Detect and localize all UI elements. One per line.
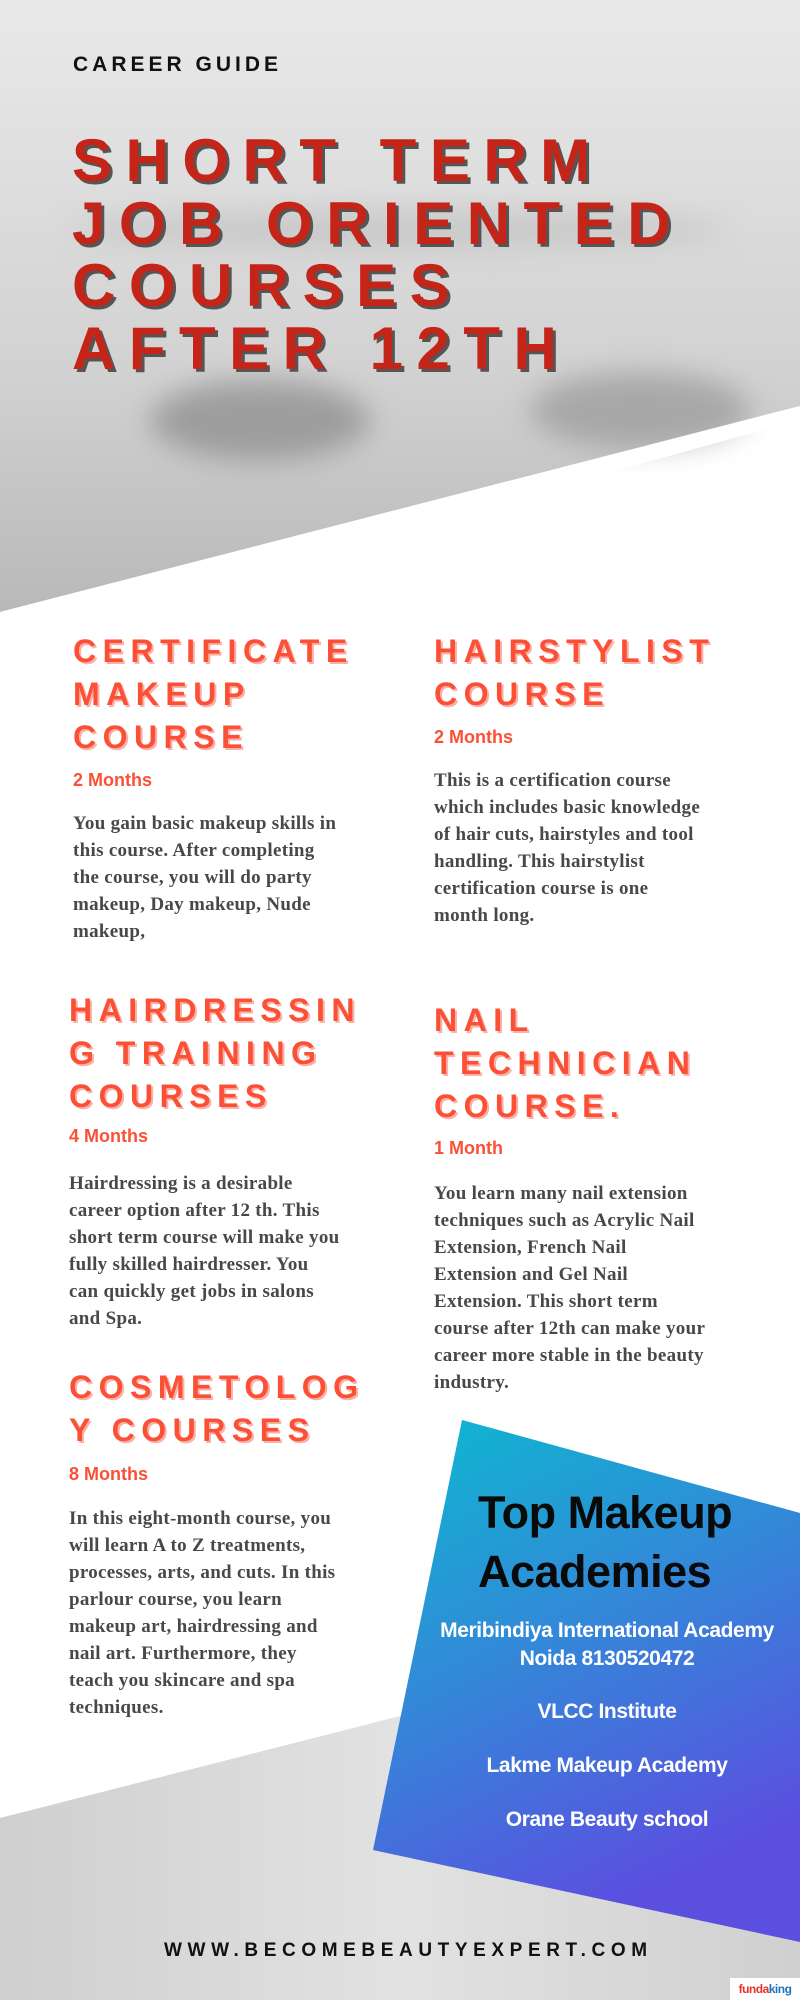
heading: TECHNICIAN bbox=[434, 1045, 696, 1081]
panel: hairdressing training courses bbox=[69, 992, 361, 1329]
academy list: Noida 8130520472 bbox=[520, 1647, 694, 1670]
title: JOB ORIENTED bbox=[72, 190, 684, 256]
footer url: WWW.BECOMEBEAUTYEXPERT.COM bbox=[164, 1940, 653, 1961]
heading: G TRAINING bbox=[69, 1035, 322, 1071]
heading bbox=[69, 992, 361, 1114]
description: makeup, bbox=[73, 921, 145, 942]
description: fully skilled hairdresser. You bbox=[69, 1254, 309, 1275]
heading: COSMETOLOG bbox=[69, 1369, 365, 1405]
heading: COURSE. bbox=[434, 1088, 625, 1124]
duration: 4 Months bbox=[69, 1126, 148, 1146]
description: can quickly get jobs in salons bbox=[69, 1281, 314, 1302]
heading bbox=[478, 1487, 732, 1597]
description: certification course is one bbox=[434, 878, 648, 899]
description: makeup, Day makeup, Nude bbox=[73, 894, 311, 915]
description: You gain basic makeup skills in bbox=[73, 813, 336, 834]
panel: certificate makeup course bbox=[73, 633, 354, 942]
description: month long. bbox=[434, 905, 534, 926]
description bbox=[69, 1173, 340, 1329]
description: makeup art, hairdressing and bbox=[69, 1616, 318, 1637]
description: Hairdressing is a desirable bbox=[69, 1173, 293, 1194]
description: will learn A to Z treatments, bbox=[69, 1535, 305, 1556]
description: industry. bbox=[434, 1372, 509, 1393]
description: this course. After completing bbox=[73, 840, 315, 861]
panel: cosmetology courses bbox=[69, 1369, 365, 1718]
description: techniques such as Acrylic Nail bbox=[434, 1210, 695, 1231]
title: COURSES bbox=[72, 252, 463, 319]
blue gradient shape bbox=[373, 1420, 800, 1942]
academy list: Orane Beauty school bbox=[506, 1808, 708, 1831]
label: career guide: CAREER GUIDE bbox=[73, 53, 282, 76]
description bbox=[73, 813, 336, 942]
description: parlour course, you learn bbox=[69, 1589, 282, 1610]
duration: 8 Months bbox=[69, 1464, 148, 1484]
heading bbox=[69, 1369, 365, 1448]
description: of hair cuts, hairstyles and tool bbox=[434, 824, 694, 845]
heading: NAIL bbox=[434, 1002, 535, 1038]
heading: Top Makeup bbox=[478, 1487, 732, 1538]
heading bbox=[434, 633, 715, 712]
heading: Academies bbox=[478, 1546, 711, 1597]
description: Extension, French Nail bbox=[434, 1237, 627, 1258]
description: and Spa. bbox=[69, 1308, 142, 1329]
description: which includes basic knowledge bbox=[434, 797, 700, 818]
heading: HAIRSTYLIST bbox=[434, 633, 715, 669]
title: AFTER 12TH bbox=[72, 314, 570, 382]
academy list: Meribindiya International Academy bbox=[440, 1619, 774, 1642]
description: handling. This hairstylist bbox=[434, 851, 645, 872]
academy list: VLCC Institute bbox=[537, 1700, 677, 1723]
description: techniques. bbox=[69, 1697, 164, 1718]
heading bbox=[73, 633, 354, 755]
description: In this eight-month course, you bbox=[69, 1508, 331, 1529]
panel: nail technician course bbox=[434, 1002, 705, 1393]
description bbox=[434, 770, 700, 926]
description: nail art. Furthermore, they bbox=[69, 1643, 297, 1664]
heading: HAIRDRESSIN bbox=[69, 992, 361, 1028]
description bbox=[69, 1508, 335, 1718]
description: processes, arts, and cuts. In this bbox=[69, 1562, 335, 1583]
background photo: bottom bbox=[0, 1614, 800, 2000]
title: SHORT TERM bbox=[72, 127, 604, 194]
heading: COURSES bbox=[69, 1078, 273, 1114]
description: course after 12th can make your bbox=[434, 1318, 705, 1339]
description: teach you skincare and spa bbox=[69, 1670, 295, 1691]
panel: top makeup academies bbox=[373, 1420, 800, 1942]
description: You learn many nail extension bbox=[434, 1183, 688, 1204]
description: career option after 12 th. This bbox=[69, 1200, 320, 1221]
duration: 1 Month bbox=[434, 1138, 503, 1158]
duration: 2 Months bbox=[434, 727, 513, 747]
description: the course, you will do party bbox=[73, 867, 312, 888]
heading: CERTIFICATE bbox=[73, 633, 354, 669]
heading: Y COURSES bbox=[69, 1412, 315, 1448]
description: short term course will make you bbox=[69, 1227, 340, 1248]
heading bbox=[434, 1002, 696, 1124]
title bbox=[72, 127, 684, 382]
heading: COURSE bbox=[73, 719, 249, 755]
description: career more stable in the beauty bbox=[434, 1345, 704, 1366]
description: Extension. This short term bbox=[434, 1291, 658, 1312]
description bbox=[434, 1183, 705, 1393]
academy list bbox=[440, 1619, 774, 1831]
description: Extension and Gel Nail bbox=[434, 1264, 628, 1285]
heading: COURSE bbox=[434, 676, 610, 712]
duration: 2 Months bbox=[73, 770, 152, 790]
heading: MAKEUP bbox=[73, 676, 251, 712]
logo: fundaking bbox=[730, 1978, 800, 2000]
academy list: Lakme Makeup Academy bbox=[486, 1754, 728, 1777]
logo: fundaking: fundaking bbox=[739, 1982, 791, 1996]
panel: hairstylist course bbox=[434, 633, 715, 926]
description: This is a certification course bbox=[434, 770, 671, 791]
